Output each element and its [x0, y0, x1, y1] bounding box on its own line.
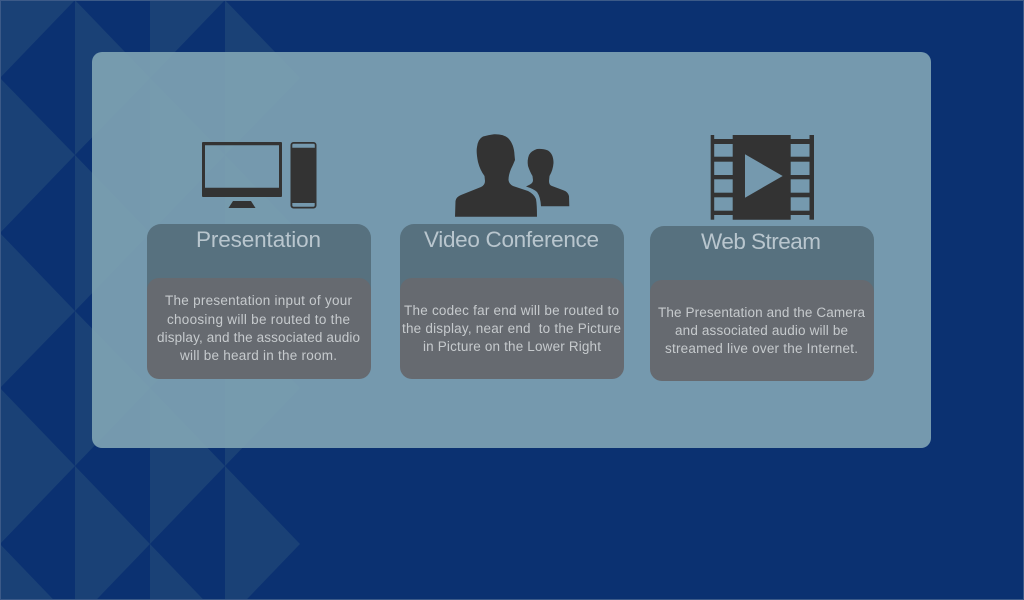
description: Video Conference: in Picture on the Lower Right — [423, 339, 601, 354]
card body: Presentation — [147, 278, 371, 379]
description: Web Stream: The Presentation and the Camera — [658, 305, 865, 320]
description: Video Conference — [402, 303, 621, 354]
card: Web Stream — [650, 135, 874, 381]
description: Web Stream: streamed live over the Internet. — [665, 341, 858, 356]
card header: Video Conference — [400, 224, 624, 324]
description: Video Conference: the display, near end to the Picture — [402, 321, 621, 336]
icon: two people — [455, 134, 569, 217]
card header: Web Stream — [650, 226, 874, 326]
card: Video Conference — [400, 134, 624, 379]
description: Presentation: display, and the associated audio — [157, 330, 360, 345]
heading: Presentation: Presentation — [196, 227, 321, 252]
card: Presentation — [147, 142, 371, 379]
icon: film strip with play button — [711, 135, 814, 220]
description: Web Stream: and associated audio will be — [675, 323, 848, 338]
background diamond pattern — [0, 0, 300, 600]
description: Video Conference: The codec far end will be routed to — [404, 303, 619, 318]
card body: Video Conference — [400, 278, 624, 379]
icon: desktop computer and tower — [202, 142, 316, 208]
heading: Video Conference: Video Conference — [424, 227, 599, 252]
description: Web Stream — [658, 305, 865, 356]
card body: Web Stream — [650, 280, 874, 381]
description: Presentation: The presentation input of your — [165, 293, 352, 308]
description: Presentation: choosing will be routed to the — [167, 312, 350, 327]
description: Presentation — [157, 293, 360, 363]
card header: Presentation — [147, 224, 371, 324]
main panel — [92, 52, 931, 448]
description: Presentation: will be heard in the room. — [179, 348, 337, 363]
heading: Web Stream: Web Stream — [701, 229, 821, 254]
